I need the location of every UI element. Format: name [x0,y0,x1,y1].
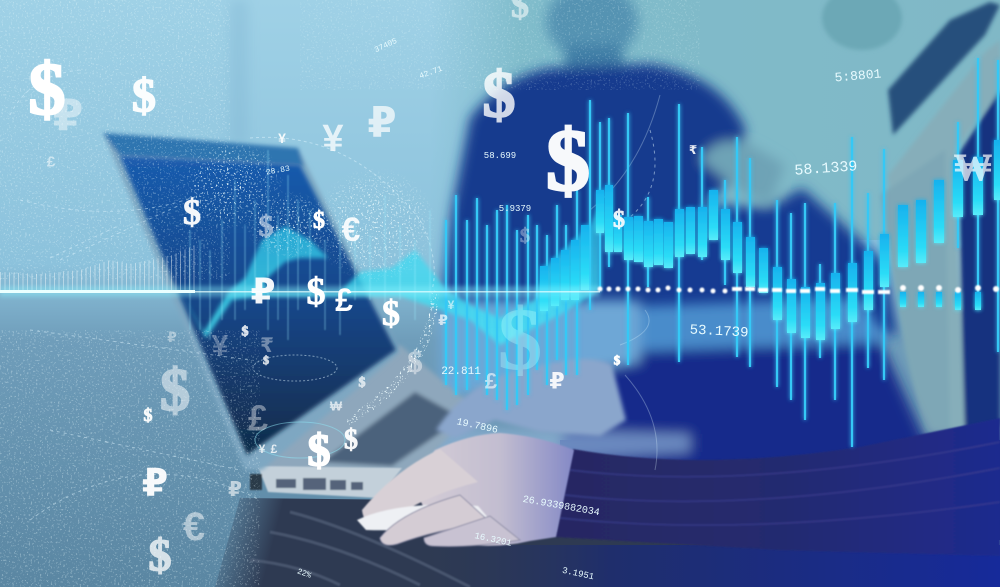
currency symbols: ₹ [689,143,697,157]
glowing horizontal axis line [0,286,600,297]
globe particles [0,0,700,587]
currency symbols: ¥ [278,130,286,146]
laptop front edge with ports [250,466,402,498]
currency symbols: ₩ [330,398,343,414]
currency symbols: ₽ [167,329,177,345]
currency symbols: £ [271,442,278,456]
left volume lines [0,245,195,293]
currency symbols: $ [160,357,190,423]
currency symbols: ₩ [954,147,992,189]
currency symbols: $ [132,70,156,122]
laptop deck and keyboard [250,345,475,495]
floating market numbers: 19.7896 [455,417,499,437]
currency symbols: ₽ [142,463,168,505]
currency symbols: ₽ [228,479,242,501]
floating market numbers [265,37,882,582]
currency symbols: $ [520,225,530,247]
currency symbols: $ [358,376,366,390]
currency symbols: ₽ [549,368,565,394]
currency symbols: $ [313,208,325,234]
middle finger [380,495,490,545]
currency symbols: £ [485,368,498,394]
currency symbols: $ [344,424,358,456]
currency symbols: $ [263,353,269,367]
hand on mouse [357,433,574,546]
currency symbols: ₽ [53,92,83,140]
back hand on keyboard [436,359,626,438]
thin lines across globe chart [190,150,430,340]
floating market numbers: 37405 [373,37,399,55]
currency symbols: € [342,211,361,249]
computer mouse [357,505,490,530]
currency symbols: € [183,505,205,549]
currency symbols: ₽ [367,98,397,146]
currency symbols: ₹ [260,335,274,357]
floating market numbers: 42.71 [418,65,444,81]
currency symbols: £ [335,282,353,318]
wooden desk [215,498,1000,587]
currency symbols: $ [308,424,330,476]
floating market numbers: 22% [296,567,312,581]
currency symbols: $ [306,271,326,313]
currency symbols: $ [183,192,201,232]
floating market numbers: 5:8801 [834,66,882,86]
floating market numbers: 28.83 [265,164,291,178]
floating market numbers: 58.1339 [794,158,858,180]
colleague on the right with cardigan [822,0,1000,436]
floating market numbers: 16.3201 [473,531,513,549]
palm [410,433,574,546]
floating market numbers: 58.699 [484,151,516,161]
currency symbols: $ [546,112,590,210]
currency symbols: ¥ [259,442,266,456]
floating market numbers: 5.9379 [499,204,531,214]
currency symbols: $ [498,292,542,388]
currency symbols: ¥ [212,330,229,362]
currency symbols: £ [248,398,268,438]
currency symbols: $ [28,49,66,131]
axis dots [598,285,999,294]
laptop [103,133,475,498]
currency symbols: £ [47,154,56,170]
currency symbols: $ [408,346,422,378]
floating market numbers: 22.811 [441,366,481,378]
currency symbols: $ [258,210,274,242]
sweater sleeve [555,418,1000,556]
ring finger [424,516,520,546]
floating market numbers: 3.1951 [561,566,595,582]
floating market numbers: 26.9339882034 [522,495,600,519]
floating market numbers: 53.1739 [689,322,749,342]
currency symbols: $ [614,352,621,368]
currency symbols: $ [382,293,400,333]
table area and forearm shadows [400,298,1000,520]
currency symbols: $ [242,324,248,340]
currency symbols: $ [144,405,152,425]
currency symbols: $ [613,207,625,233]
orbit arcs and dashed rays [10,70,660,520]
laptop lid bezel [103,133,400,470]
candlestick bodies [540,140,1000,340]
currency symbols: ₽ [438,312,448,328]
currency symbols: $ [482,58,516,132]
currency symbols: ¥ [322,118,344,160]
blurred colleague in the background [440,0,897,370]
currency symbols: ₽ [250,270,276,312]
laptop screen [120,156,396,455]
currency symbols: ¥ [448,298,455,312]
index finger [362,449,478,525]
cyan area chart behind globe [178,205,600,345]
currency symbols: $ [148,530,172,580]
candlestick wicks [446,58,998,447]
